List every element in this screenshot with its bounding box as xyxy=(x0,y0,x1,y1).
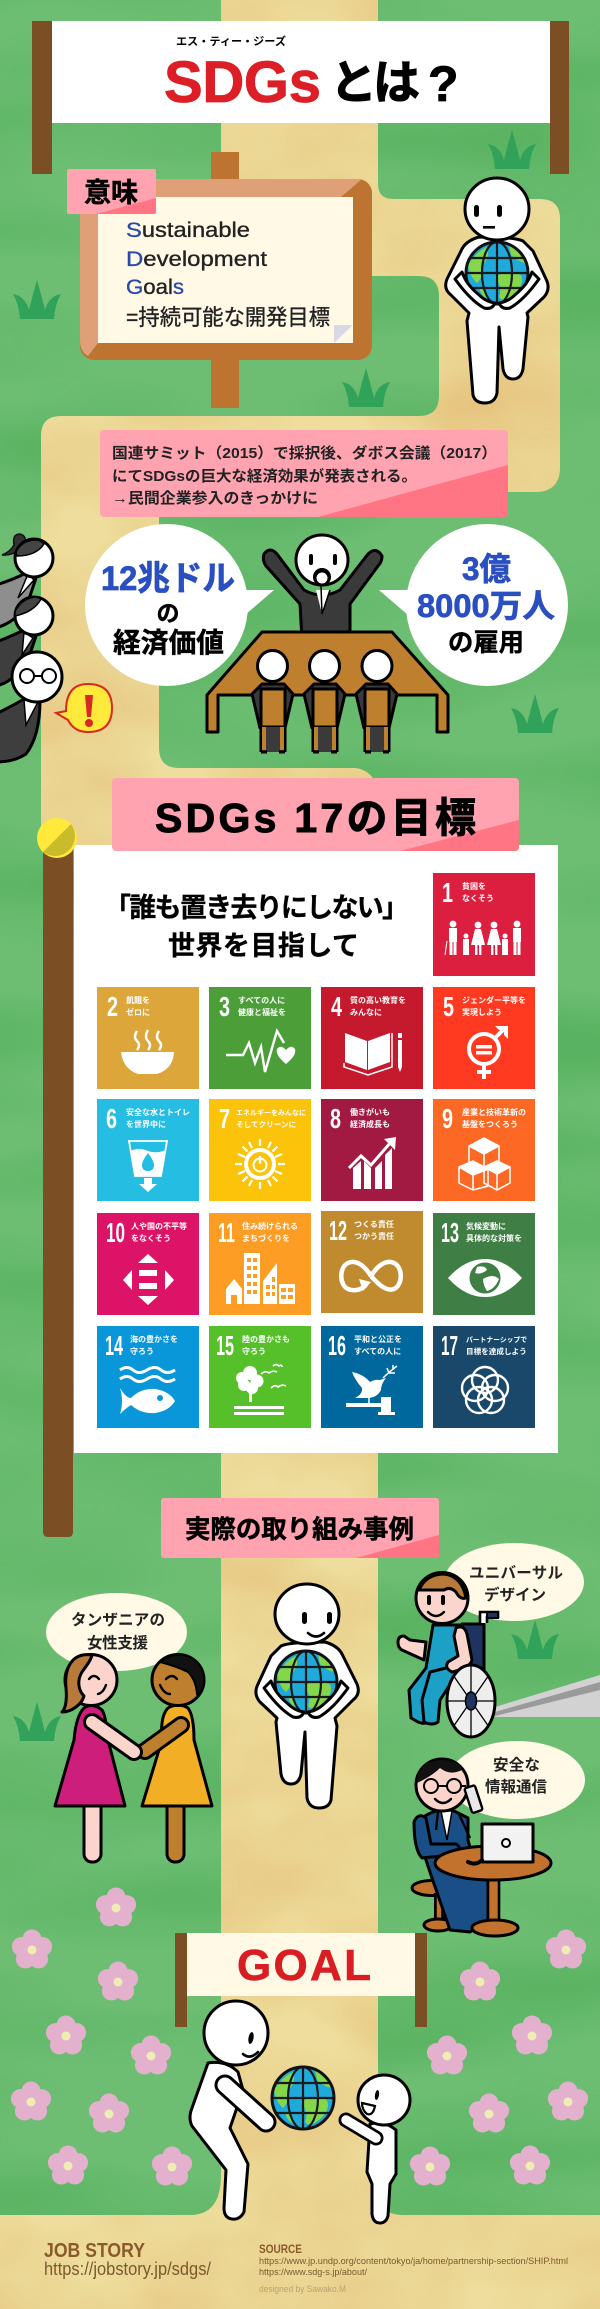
goal tile 9: 基盤をつくろう xyxy=(462,1119,518,1129)
meaning text: Sustainable xyxy=(126,219,250,242)
goal tile 7: 7 xyxy=(219,1103,230,1134)
goal tile 16: すべての人に xyxy=(354,1347,401,1356)
callout: UN summit history: →民間企業参入のきっかけに xyxy=(112,489,318,507)
pin xyxy=(37,818,77,858)
goal tile 5: ジェンダー平等を xyxy=(462,995,526,1005)
goal tile 12 xyxy=(321,1211,423,1313)
goal tile 11: まちづくりを xyxy=(242,1233,290,1243)
goal tile 14: 14 xyxy=(105,1330,123,1361)
goal tile 16: 平和と公正を xyxy=(354,1334,402,1344)
goal tile 1: 貧困を xyxy=(462,881,486,891)
speech bubble: universal design: デザイン xyxy=(484,1585,546,1604)
goal banner: GOAL xyxy=(237,1941,371,1990)
goal tile 17: 17 xyxy=(441,1330,458,1361)
table xyxy=(207,632,448,732)
character: child receiving globe xyxy=(346,2075,410,2223)
speech bubble: universal design: ユニバーサル xyxy=(469,1564,563,1582)
character: woman in yellow dress xyxy=(92,1654,212,1862)
footer brand: JOB STORY xyxy=(44,2240,146,2262)
goal tile 12: つくる責任 xyxy=(354,1219,394,1229)
goal tile 11: 住み続けられる xyxy=(242,1221,298,1231)
goal banner xyxy=(175,1933,427,2027)
footer sources: SOURCE xyxy=(259,2242,302,2256)
character: adult passing globe xyxy=(190,2001,268,2219)
footer sources: https://www.jp.undp.org/content/tokyo/ja/home/partnership-section/SHIP.html xyxy=(259,2256,568,2267)
goal tile 11: 11 xyxy=(218,1217,235,1248)
speech bubble: economic value: 経済価値 xyxy=(113,627,224,658)
goal tile 7: エネルギーをみんなに xyxy=(236,1108,306,1117)
goal tile 3: 健康と福祉を xyxy=(238,1007,286,1017)
footer brand xyxy=(44,2240,211,2279)
meaning text xyxy=(126,219,330,330)
peeking listeners xyxy=(0,534,62,762)
goal tile 2 xyxy=(97,987,199,1089)
goal tile 1: 1 xyxy=(442,877,453,908)
flowers xyxy=(11,1888,588,2186)
heading: case studies: 実際の取り組み事例 xyxy=(185,1516,414,1544)
signboard: meaning xyxy=(67,152,372,408)
tag: 意味 xyxy=(67,169,156,214)
speech bubble: employment xyxy=(379,524,568,686)
goal tile 2: 飢餓を xyxy=(126,995,150,1005)
title main xyxy=(164,50,459,115)
goal tile 14: 守ろう xyxy=(130,1346,154,1356)
goal tile 3 xyxy=(209,987,311,1089)
goal tile 7: そしてクリーンに xyxy=(236,1119,296,1129)
slogan: 世界を目指して xyxy=(168,931,359,961)
meaning text: Goals xyxy=(126,276,184,299)
speech bubble: Tanzania: 女性支援 xyxy=(87,1633,148,1652)
globe being passed xyxy=(272,2067,334,2129)
goal tile 6: 6 xyxy=(106,1103,117,1134)
slogan xyxy=(104,893,409,961)
goal tile 4 xyxy=(321,987,423,1089)
title main: ? xyxy=(428,56,459,112)
speech bubble: economic value: の xyxy=(156,600,180,626)
goal tile 17: パートナーシップで xyxy=(466,1336,527,1344)
goal tile 7 xyxy=(209,1099,311,1201)
goal tile 10: 10 xyxy=(106,1217,125,1248)
callout: UN summit history xyxy=(100,430,508,517)
title main: とは xyxy=(330,56,420,109)
goal tile 14 xyxy=(97,1326,199,1428)
goal tile 15: 陸の豊かさも xyxy=(242,1334,290,1344)
speaker at table xyxy=(207,535,448,752)
goal tile 15: 守ろう xyxy=(242,1346,266,1356)
footer sources: designed by Sawako.M xyxy=(259,2284,346,2295)
wheelchair ramp xyxy=(495,1675,600,1717)
goal tile 13: 具体的な対策を xyxy=(466,1233,522,1243)
speech bubble: Tanzania: タンザニアの xyxy=(71,1611,165,1629)
goal tile 5 xyxy=(433,987,535,1089)
goal tile 2: 2 xyxy=(107,991,118,1022)
goal tile 1 xyxy=(433,873,535,976)
character holding globe: smiling xyxy=(256,1584,358,1808)
heading: 17 goals xyxy=(112,778,519,851)
goal tile 6: 安全な水とトイレ xyxy=(126,1107,190,1117)
goal tile 5: 5 xyxy=(443,991,454,1022)
goal tile 13: 気候変動に xyxy=(466,1221,506,1231)
heading: 17 goals: SDGs 17の目標 xyxy=(155,795,476,841)
goal tile 9: 9 xyxy=(442,1103,453,1134)
goal tile 11 xyxy=(209,1213,311,1315)
speech bubble: economic value: 12兆ドル xyxy=(101,560,235,598)
heading: case studies xyxy=(161,1498,439,1558)
speech bubble: Tanzania xyxy=(46,1593,187,1671)
goal tile 8: 8 xyxy=(330,1103,341,1134)
goal tile 5: 実現しよう xyxy=(462,1007,502,1017)
goal tile 16: 16 xyxy=(328,1330,346,1361)
character: wheelchair user xyxy=(398,1572,498,1737)
goal tile 8: 経済成長も xyxy=(350,1119,390,1129)
goal tile 17: 目標を達成しよう xyxy=(466,1346,527,1356)
goal tile 1: なくそう xyxy=(462,894,494,903)
speech bubble: employment: 3億 xyxy=(462,551,511,587)
goal tile 3: 3 xyxy=(219,991,230,1022)
goal tile 14: 海の豊かさを xyxy=(130,1334,178,1344)
goals panel xyxy=(74,845,558,1453)
title banner xyxy=(32,21,569,174)
wheel xyxy=(447,1665,495,1737)
goal tile 12: 12 xyxy=(329,1215,347,1246)
goal tile 6 xyxy=(97,1099,199,1201)
goal tile 4: 4 xyxy=(331,991,342,1022)
speech bubble: economic value xyxy=(85,524,274,686)
goal tile 6: を世界中に xyxy=(126,1119,166,1129)
goal tile 10 xyxy=(97,1213,199,1315)
speech bubble: employment: 8000万人 xyxy=(417,588,555,624)
audience xyxy=(252,650,397,752)
speech bubble: employment: の雇用 xyxy=(448,629,524,657)
goal tile 10: をなくそう xyxy=(131,1234,171,1243)
goal tile 16 xyxy=(321,1326,423,1428)
exclamation bubble xyxy=(56,684,112,732)
goal tile 13: 13 xyxy=(441,1217,459,1248)
footer brand: https://jobstory.jp/sdgs/ xyxy=(44,2259,211,2279)
handshake arms xyxy=(92,1722,181,1752)
goals panel post xyxy=(43,838,73,1537)
phone xyxy=(464,1785,483,1813)
speech bubble: secure comms: 安全な xyxy=(493,1755,540,1774)
goal tile 15: 15 xyxy=(216,1330,234,1361)
goal tile 9 xyxy=(433,1099,535,1201)
footer sources xyxy=(259,2242,568,2295)
goal tile 15 xyxy=(209,1326,311,1428)
goal tile 8 xyxy=(321,1099,423,1201)
meaning text: Development xyxy=(126,248,267,271)
meaning text: =持続可能な開発目標 xyxy=(126,305,330,330)
title ruby: エス・ティー・ジーズ xyxy=(176,34,286,48)
speech bubble: secure comms xyxy=(449,1741,585,1819)
grass tufts xyxy=(13,130,559,1741)
goal tile 4: 質の高い教育を xyxy=(350,995,406,1005)
character: woman in pink dress xyxy=(55,1654,125,1862)
tag: 意味: 意味 xyxy=(84,178,138,208)
goal tile 10: 人や国の不平等 xyxy=(131,1221,187,1231)
goal tile 4: みんなに xyxy=(350,1008,382,1017)
footer sources: https://www.sdg-s.jp/about/ xyxy=(259,2267,367,2278)
title main: SDGs xyxy=(164,50,321,115)
character holding globe: neutral xyxy=(446,178,548,403)
character: man on phone at table xyxy=(412,1759,551,1936)
slogan: 「誰も置き去りにしない」 xyxy=(104,893,409,923)
goal tile 3: すべての人に xyxy=(238,996,285,1005)
goal tile 2: ゼロに xyxy=(126,1007,150,1017)
speech bubble: secure comms: 情報通信 xyxy=(485,1777,547,1796)
goal tile 17 xyxy=(433,1326,535,1428)
goal tile 8: 働きがいも xyxy=(350,1107,390,1117)
callout: UN summit history: にてSDGsの巨大な経済効果が発表される。 xyxy=(112,467,417,485)
speech bubble: universal design xyxy=(444,1543,584,1621)
goal tile 9: 産業と技術革新の xyxy=(462,1107,526,1117)
goal tile 13 xyxy=(433,1213,535,1315)
callout: UN summit history: 国連サミット（2015）で採択後、ダボス会議（2017） xyxy=(112,444,497,462)
goal tile 12: つかう責任 xyxy=(354,1231,394,1241)
